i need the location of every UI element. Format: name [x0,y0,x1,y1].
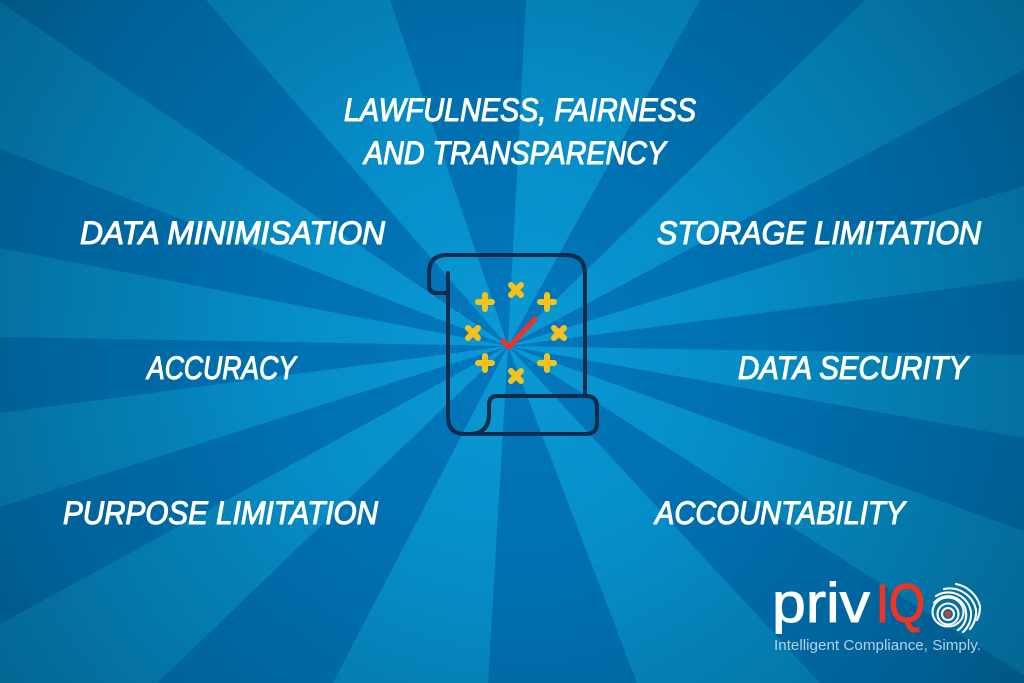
heading: lawfulness, fairness and transparency: AND TRANSPARENCY [362,135,668,171]
icon: scroll with EU stars and check mark [429,255,597,434]
logo wordmark accent: IQ [876,574,925,634]
label: data minimisation: DATA MINIMISATION [80,215,386,251]
EU stars [468,285,564,381]
label: data security: DATA SECURITY [738,350,970,386]
heading: lawfulness, fairness and transparency: LAWFULNESS, FAIRNESS [344,92,696,128]
logo fingerprint mark [932,584,980,632]
heading: lawfulness, fairness and transparency [344,92,696,171]
logo tagline: Intelligent Compliance, Simply. [774,637,981,654]
logo: privIQ [772,571,981,654]
label: accuracy: ACCURACY [145,350,298,386]
logo wordmark: priv [772,571,870,634]
label: purpose limitation: PURPOSE LIMITATION [63,495,379,531]
scroll outline [429,255,597,434]
label: storage limitation: STORAGE LIMITATION [657,215,982,251]
red check mark [503,319,535,347]
label: accountability: ACCOUNTABILITY [653,495,907,531]
